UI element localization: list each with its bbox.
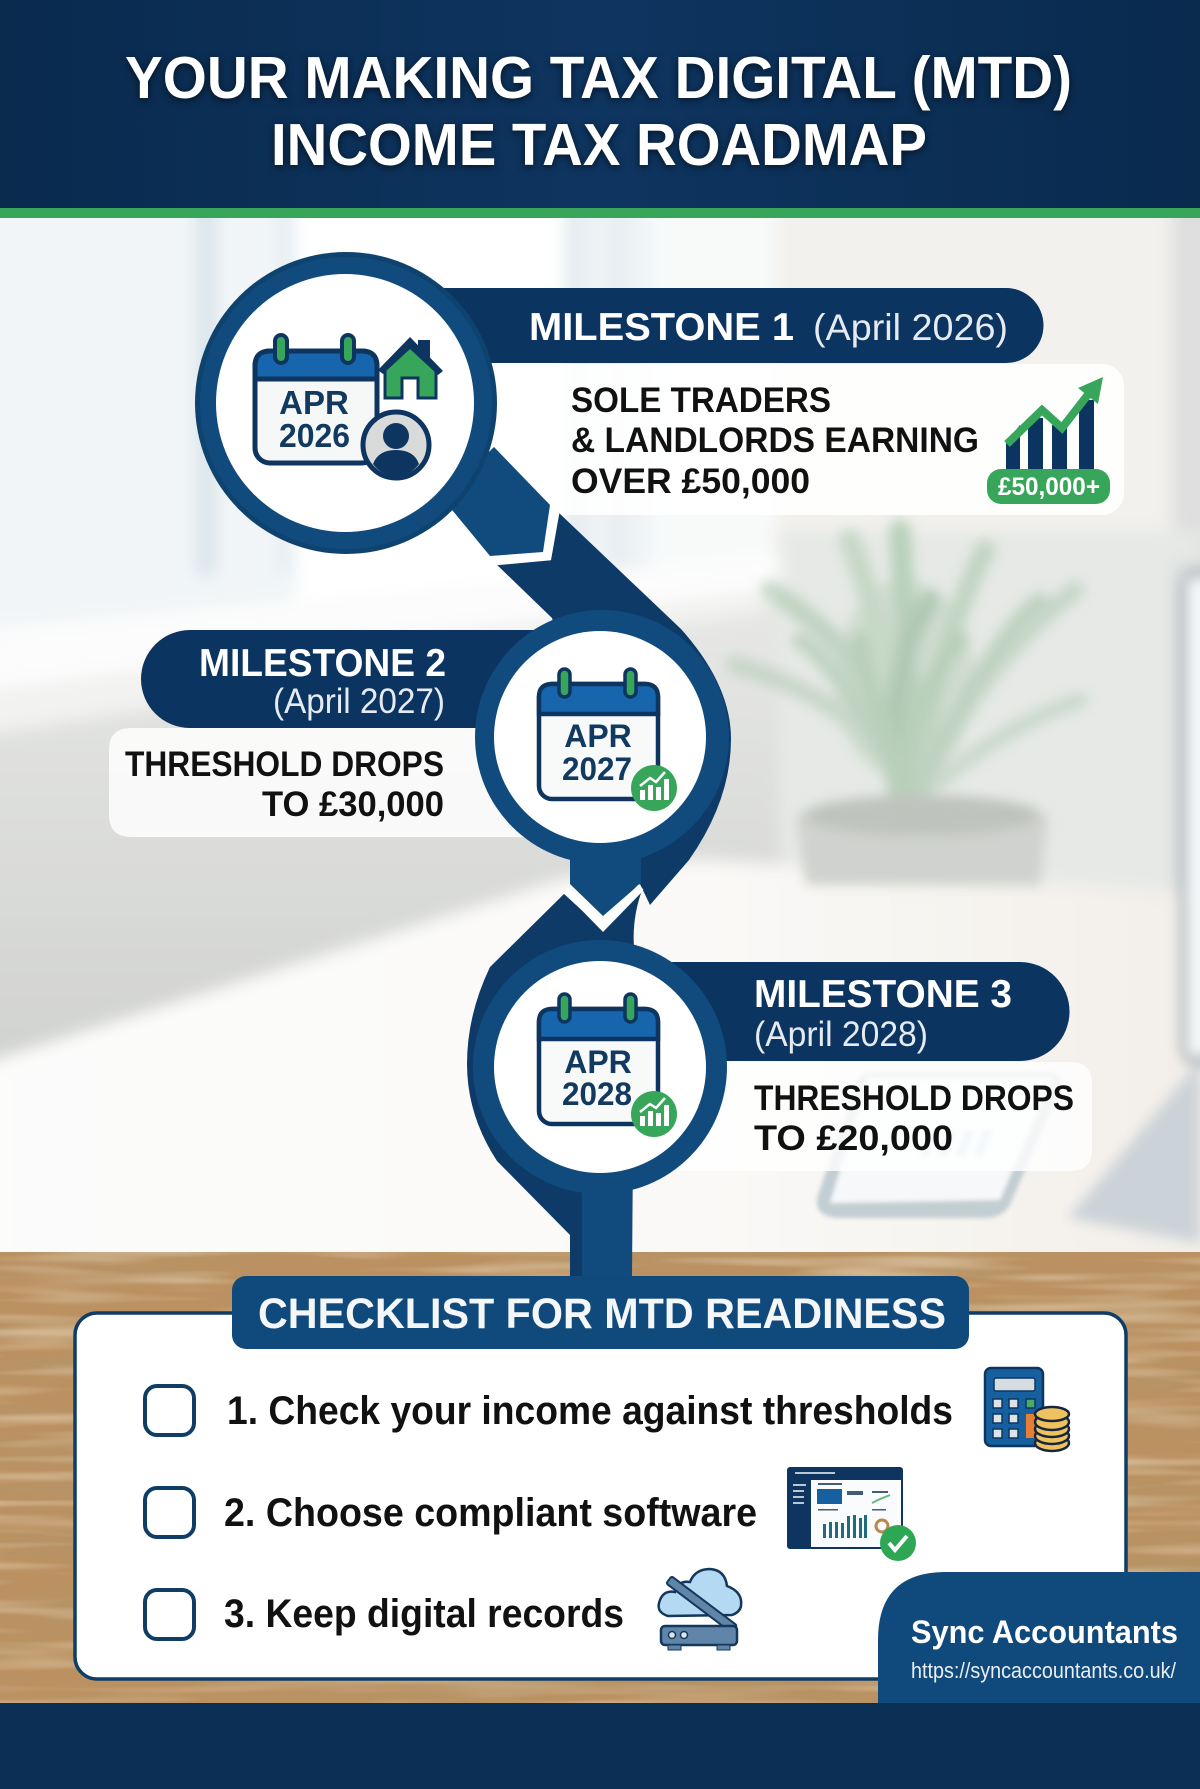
- icon: calendar april 2027 with chart badge: 2027: [562, 751, 632, 787]
- icon: calendar april 2026 with house and person: APR: [279, 384, 349, 421]
- icon: calendar april 2027 with chart badge: [539, 669, 677, 811]
- connector path: milestone 2 to 3: [467, 850, 641, 1276]
- milestone 2 heading pill: MILESTONE 2: [199, 642, 446, 685]
- icon: calendar april 2027 with chart badge: APR: [564, 718, 632, 754]
- checklist item 3: 3. Keep digital records: [224, 1592, 624, 1636]
- icon: calendar april 2026 with house and person: 2026: [279, 417, 350, 454]
- milestone 3 heading pill: (April 2028): [754, 1015, 928, 1054]
- milestone 1 description text: & LANDLORDS EARNING: [571, 421, 979, 460]
- milestone 1 description text: SOLE TRADERS: [571, 381, 831, 420]
- icon: calculator and coins: [985, 1368, 1069, 1451]
- milestone 3 heading pill: MILESTONE 3: [754, 973, 1012, 1016]
- icon: calendar april 2028 with chart badge: APR: [564, 1044, 632, 1080]
- milestone 2 description text: THRESHOLD DROPS: [125, 745, 444, 784]
- company contact box: https://syncaccountants.co.uk/: [911, 1658, 1177, 1683]
- company contact box: [878, 1572, 1200, 1703]
- icon: software dashboard with check: [787, 1467, 916, 1561]
- milestone 1 description text: [571, 381, 979, 501]
- milestone 2 description text: [125, 745, 444, 824]
- checklist item 2: 2. Choose compliant software: [224, 1491, 757, 1535]
- panel: milestone 2 description: [109, 728, 560, 837]
- milestone 3 description text: TO £20,000: [754, 1119, 953, 1158]
- icon: growth chart with £50,000+ badge: £50,000+: [998, 473, 1100, 501]
- panel: milestone 1 description: [470, 364, 1124, 515]
- connector path: milestone 1 to 2: [448, 447, 731, 905]
- milestone 2 circle: [475, 610, 729, 864]
- panel: checklist: [75, 1276, 1126, 1679]
- milestone 1 description text: OVER £50,000: [571, 462, 810, 501]
- milestone 3 description text: THRESHOLD DROPS: [754, 1079, 1074, 1118]
- panel: milestone 3 description: [640, 1062, 1092, 1171]
- title: [125, 45, 1072, 178]
- icon: scanner and cloud: [659, 1569, 741, 1650]
- milestone 1 circle: [195, 252, 497, 554]
- phone on desk: [817, 1072, 1062, 1218]
- footer band: [0, 1703, 1200, 1789]
- title: YOUR MAKING TAX DIGITAL (MTD): [125, 45, 1072, 111]
- checklist heading banner: CHECKLIST FOR MTD READINESS: [258, 1290, 946, 1338]
- milestone 1 heading pill: MILESTONE 1: [529, 306, 794, 349]
- milestone 1 heading pill: [430, 288, 1044, 363]
- checklist heading banner: [232, 1276, 969, 1349]
- icon: calendar april 2028 with chart badge: 2028: [562, 1076, 632, 1112]
- header band: [0, 0, 1200, 218]
- milestone 3 heading pill: [640, 962, 1070, 1061]
- milestone 3 description text: [754, 1079, 1074, 1158]
- milestone 2 description text: TO £30,000: [262, 785, 444, 824]
- milestone 3 circle: [473, 940, 727, 1194]
- wood desk band: [0, 1252, 1200, 1704]
- icon: growth chart with £50,000+ badge: [987, 377, 1110, 504]
- laptop: [1180, 570, 1200, 1065]
- plant: [735, 530, 1080, 800]
- title: INCOME TAX ROADMAP: [271, 112, 927, 178]
- milestone 2 heading pill: [141, 630, 560, 728]
- checklist item 1: 1. Check your income against thresholds: [227, 1389, 953, 1433]
- background photo: blurred office: [0, 200, 1200, 1270]
- icon: calendar april 2026 with house and person: [255, 335, 443, 478]
- milestone 2 heading pill: (April 2027): [273, 682, 445, 721]
- company contact box: Sync Accountants: [911, 1614, 1178, 1650]
- icon: calendar april 2028 with chart badge: [539, 994, 677, 1137]
- milestone 1 heading pill: (April 2026): [813, 307, 1008, 348]
